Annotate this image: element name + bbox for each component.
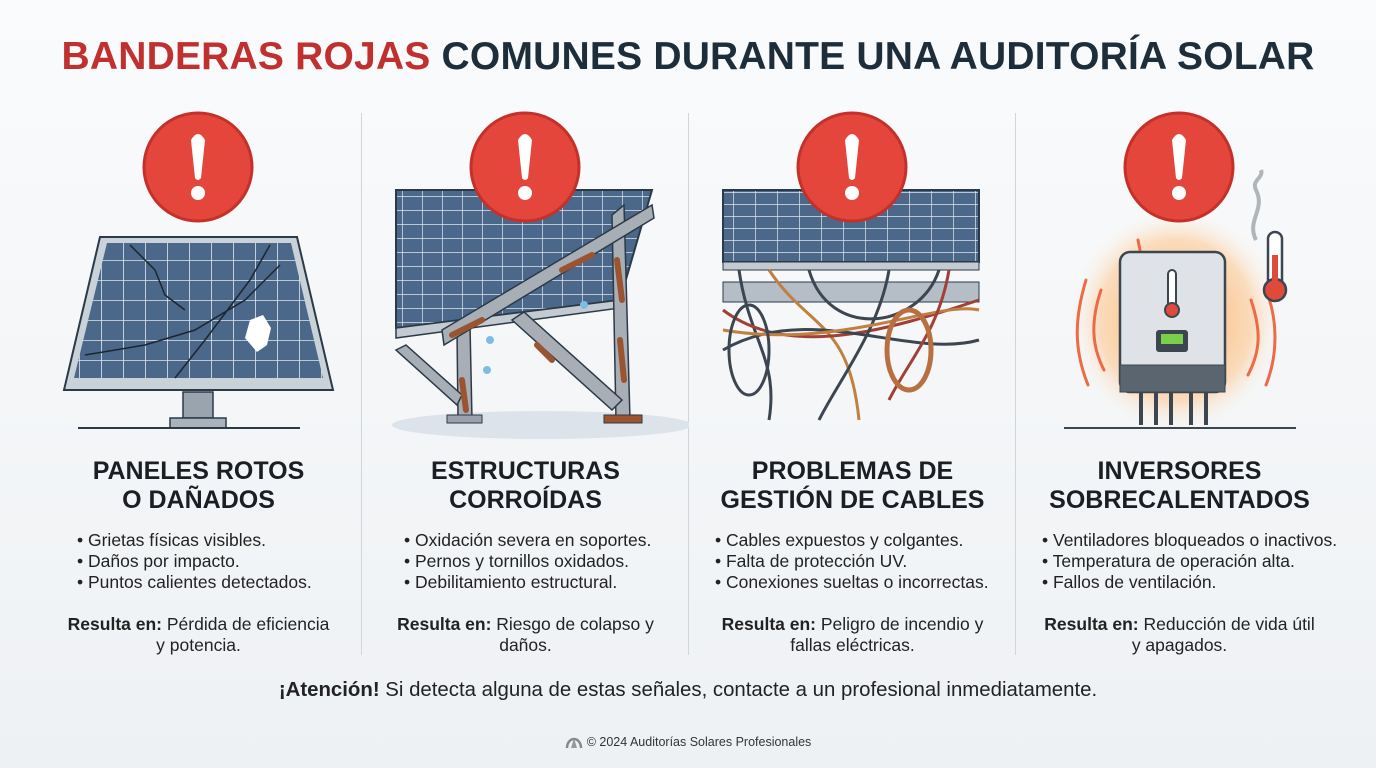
icon: alert [144, 113, 252, 221]
heading: INVERSORES [1098, 457, 1261, 485]
bullets: • Ventiladores bloqueados o inactivos. [1042, 530, 1337, 550]
result: daños. [499, 635, 552, 655]
bullets [715, 530, 989, 592]
result: Resulta en: Peligro de incendio y [722, 614, 983, 634]
result [722, 614, 984, 655]
bullets [404, 530, 651, 592]
icon: alert [798, 113, 906, 221]
bullets: • Daños por impacto. [77, 551, 240, 571]
bullets: • Pernos y tornillos oxidados. [404, 551, 629, 571]
panel: inversores [1042, 112, 1337, 655]
heading: SOBRECALENTADOS [1049, 486, 1310, 514]
bullets: • Grietas físicas visibles. [77, 530, 266, 550]
panel: cables [715, 112, 989, 655]
illustration: hot inverter [1064, 112, 1296, 429]
footer: © 2024 Auditorías Solares Profesionales [587, 735, 811, 749]
bullets: • Debilitamiento estructural. [404, 572, 617, 592]
bullets: • Falta de protección UV. [715, 551, 907, 571]
bullets: • Temperatura de operación alta. [1042, 551, 1295, 571]
heading: CORROÍDAS [449, 486, 602, 514]
panel: paneles rotos [62, 112, 334, 655]
result: Resulta en: Riesgo de colapso y [397, 614, 654, 634]
bullets: • Cables expuestos y colgantes. [715, 530, 963, 550]
result: fallas eléctricas. [790, 635, 915, 655]
illustration: broken panel [62, 112, 334, 429]
bullets [77, 530, 312, 592]
bullets: • Conexiones sueltas o incorrectas. [715, 572, 989, 592]
heading [93, 457, 304, 514]
bullets: • Oxidación severa en soportes. [404, 530, 651, 550]
icon: alert [471, 113, 579, 221]
heading: PROBLEMAS DE [752, 457, 953, 485]
result: y apagados. [1132, 635, 1227, 655]
panel: estructuras corroídas [392, 112, 689, 655]
result [1044, 614, 1315, 655]
illustration: messy cables [722, 112, 980, 421]
title: BANDERAS ROJAS COMUNES DURANTE UNA AUDITORÍA SOLAR [62, 35, 1314, 78]
heading [431, 457, 620, 514]
bullets: • Fallos de ventilación. [1042, 572, 1216, 592]
heading [721, 457, 984, 514]
result [68, 614, 330, 655]
icon: alert [1125, 113, 1233, 221]
attention note: ¡Atención! Si detecta alguna de estas señales, contacte a un profesional inmediatamente. [279, 679, 1097, 701]
result: y potencia. [156, 635, 241, 655]
heading: PANELES ROTOS [93, 457, 304, 485]
heading: O DAÑADOS [122, 486, 275, 514]
result: Resulta en: Reducción de vida útil [1044, 614, 1315, 634]
heading [1049, 457, 1310, 514]
bullets: • Puntos calientes detectados. [77, 572, 312, 592]
result [397, 614, 654, 655]
bullets [1042, 530, 1337, 592]
heading: ESTRUCTURAS [431, 457, 620, 485]
heading: GESTIÓN DE CABLES [721, 486, 984, 514]
illustration: corroded structure [392, 112, 689, 439]
result: Resulta en: Pérdida de eficiencia [68, 614, 329, 634]
